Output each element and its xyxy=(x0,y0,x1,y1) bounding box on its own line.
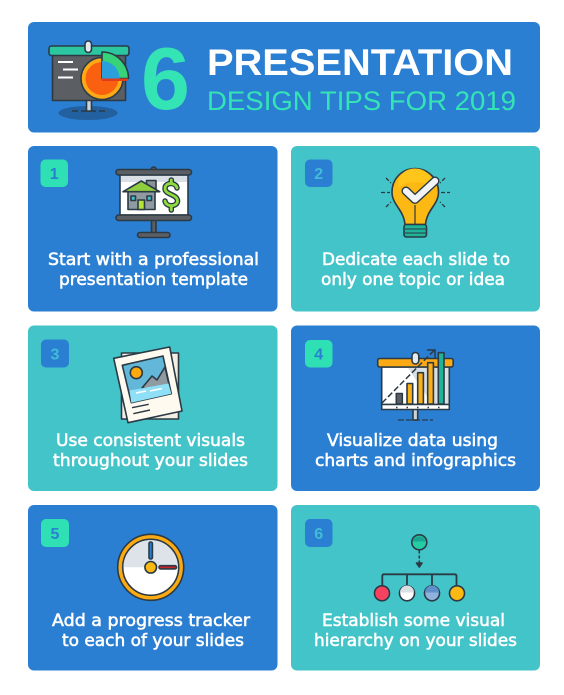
tip text 3 xyxy=(53,431,248,470)
icon: progress clock xyxy=(118,534,184,600)
big numeral 6: 6 xyxy=(141,29,190,128)
icon: hierarchy diagram xyxy=(374,535,464,601)
tip text 6 xyxy=(314,611,517,650)
tip text 4: Visualize data using xyxy=(327,431,498,450)
badge: 6: 6 xyxy=(314,526,323,543)
panel: tip 3 xyxy=(28,326,278,491)
tip text 2 xyxy=(321,250,510,289)
tip text 1: presentation template xyxy=(59,270,248,289)
icon: stacked photo prints xyxy=(114,347,182,423)
panel: tip 4 xyxy=(291,326,540,491)
panel: tip 1 xyxy=(28,146,278,312)
panel: tip 2 xyxy=(291,146,540,312)
badge: 4: 4 xyxy=(314,346,323,364)
tip text 3: Use consistent visuals xyxy=(56,431,245,450)
badge: 2 xyxy=(305,160,332,187)
badge: 1: 1 xyxy=(50,166,59,183)
badge: 4 xyxy=(305,340,332,368)
tip text 4 xyxy=(315,431,516,470)
panel: tip 6 xyxy=(291,505,540,670)
badge: 6 xyxy=(305,519,332,547)
badge: 3: 3 xyxy=(51,346,60,364)
heading: presentation: PRESENTATION xyxy=(207,42,513,83)
tip text 1: Start with a professional xyxy=(48,250,259,269)
tip text 5: to each of your slides xyxy=(62,631,244,650)
tip text 2: Dedicate each slide to xyxy=(322,250,510,269)
badge: 2: 2 xyxy=(314,166,323,183)
badge: 5: 5 xyxy=(51,526,60,543)
panel: header xyxy=(28,22,540,132)
icon: presentation board with pie chart xyxy=(49,41,129,120)
icon: light bulb with check mark xyxy=(381,168,450,237)
badge: 3 xyxy=(41,340,69,368)
tip text 1 xyxy=(48,250,259,289)
icon: screen with house and dollar xyxy=(116,167,192,238)
icon: screen with rising bar chart xyxy=(378,350,453,420)
badge: 5 xyxy=(41,519,69,547)
subheading: design tips for 2019: DESIGN TIPS FOR 2019 xyxy=(207,86,516,116)
tip text 5: Add a progress tracker xyxy=(52,611,250,630)
tip text 5 xyxy=(52,611,250,650)
tip text 2: only one topic or idea xyxy=(321,270,505,289)
tip text 6: Establish some visual xyxy=(322,611,505,630)
tip text 6: hierarchy on your slides xyxy=(314,631,517,650)
tip text 4: charts and infographics xyxy=(315,451,516,470)
tip text 3: throughout your slides xyxy=(53,451,248,470)
panel: tip 5 xyxy=(28,505,278,670)
badge: 1 xyxy=(40,160,68,187)
